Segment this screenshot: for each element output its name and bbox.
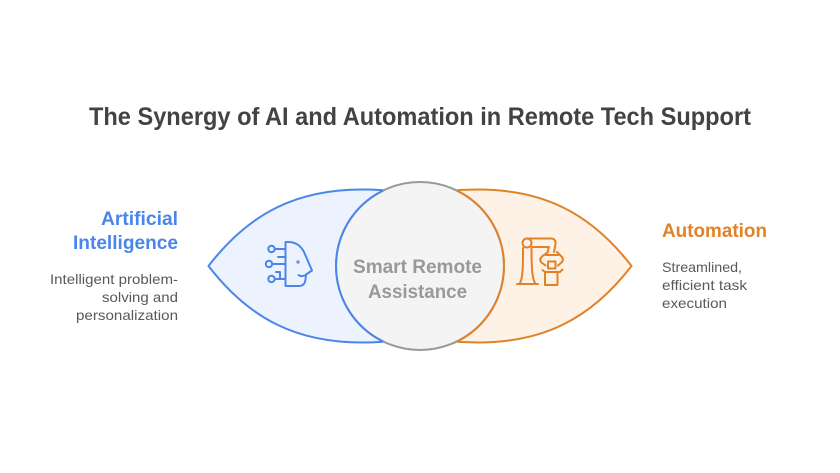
panel: automation leaf: [448, 190, 632, 342]
text: artificial intelligence description: solving and: [102, 289, 178, 305]
panel: smart remote assistance circle: [336, 182, 504, 350]
icon: robot arm: [517, 238, 563, 285]
title: The Synergy of AI and Automation in Remote Tech Support: [89, 103, 752, 131]
panel: artificial intelligence leaf: [208, 190, 392, 342]
center label: Smart Remote: [353, 257, 482, 278]
text: artificial intelligence description: Intelligent problem-: [50, 271, 178, 287]
heading: automation: Automation: [662, 221, 767, 242]
center label: Assistance: [368, 282, 467, 303]
icon: AI head: [266, 242, 312, 286]
heading: artificial intelligence: Artificial: [101, 209, 178, 230]
text: automation description: efficient task: [662, 277, 748, 293]
text: automation description: Streamlined,: [662, 259, 742, 275]
heading: artificial intelligence: Intelligence: [73, 233, 178, 254]
text: artificial intelligence description: personalization: [76, 307, 178, 323]
text: automation description: execution: [662, 295, 727, 311]
